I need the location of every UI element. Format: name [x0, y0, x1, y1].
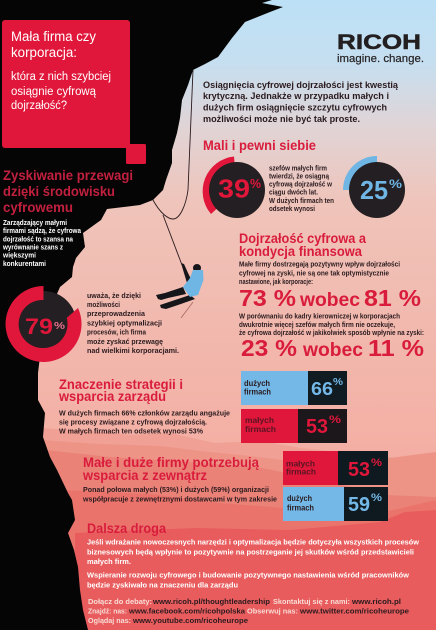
bar: large firms 66%: firmach — [244, 386, 271, 396]
text: 39% explanation: cyfrową dojrzałość w — [269, 180, 332, 188]
footer links: Znajdź: nas: — [88, 606, 127, 616]
statistic: 23% vs 11% — [241, 335, 424, 361]
text: profit optimism: cyfrowej na zyski, nie są one tak optymistycznie — [239, 268, 389, 278]
Ricoh logo — [337, 31, 424, 65]
title box — [2, 20, 146, 164]
text: profit comparison: W porównaniu do kadry kierowniczej w korporacjach — [239, 312, 400, 320]
bar: small firms 53% external: % — [371, 457, 382, 469]
heading: Małe i duże firmy — [82, 454, 259, 483]
text: small firm leaders — [2, 218, 82, 268]
footer links — [88, 597, 409, 625]
donut chart 25%: 25 — [360, 175, 388, 205]
statistic: 73% vs 81%: 73 % — [239, 285, 296, 311]
text: 79% explanation: możliwości — [87, 300, 120, 309]
black cliff — [0, 0, 283, 630]
title subheading — [11, 71, 111, 112]
heading: Dalsza droga: Dalsza droga — [87, 520, 166, 536]
donut chart 79%: % — [54, 321, 65, 332]
text: 39% explanation: szefów małych firm — [269, 164, 327, 172]
heading: Małe i duże firmy: Małe i duże firmy potrzebują — [83, 454, 259, 470]
bar: small firms 53% external: firmach — [286, 466, 316, 476]
text: profit comparison — [239, 312, 424, 337]
title subheading: osiągnie cyfrową — [11, 86, 97, 98]
heading: Znaczenie strategii: Znaczenie strategii i — [59, 376, 183, 392]
text: board engagement: W dużych firmach 66% członków zarządu angażuje — [59, 408, 230, 418]
donut chart 39%: % — [250, 176, 261, 191]
text: next steps: biznesowych będą wpłynie to pozytywnie na postrzeganie jej skutków wśród przedstawicieli — [87, 548, 414, 556]
text: profit optimism: nastawione, jak korporacje: — [239, 277, 313, 286]
text: small firm leaders: większymi — [2, 250, 36, 260]
bar: small firms 53%: % — [329, 414, 341, 426]
bar: large firms 66%: dużych — [244, 378, 270, 388]
footer links: Dołącz do debaty: — [88, 597, 152, 606]
bar: small firms 53% external: małych — [286, 458, 315, 468]
statistic: 23% vs 11%: 23 % — [241, 335, 297, 361]
donut chart 79% — [6, 286, 82, 362]
title heading: Mała firma czy — [11, 29, 96, 44]
heading: Zyskiwanie przewagi: dzięki środowisku — [3, 183, 115, 199]
bar: small firms 53%: 53 — [306, 416, 328, 438]
text: small firm leaders: wyrównanie szans z — [2, 242, 63, 252]
text: next steps — [87, 538, 419, 590]
text: 79% explanation — [87, 291, 179, 355]
footer links: www.twitter.com/ricoheurope — [299, 606, 409, 616]
text: profit comparison: dwukrotnie więcej szefów małych firm nie oczekuje, — [239, 320, 395, 329]
text: small firm leaders: dojrzałość to szansa na — [3, 234, 74, 244]
bar: large firms 59% external: firmach — [287, 502, 314, 512]
intro text — [203, 80, 399, 124]
footer links: www.ricoh.pl/thoughtleadership — [152, 597, 270, 606]
bar: large firms 59% external: 59 — [348, 494, 370, 516]
donut chart 39%: 39 — [218, 174, 250, 204]
text: profit optimism: Małe firmy dostrzegają pozytywny wpływ dojrzałości — [239, 260, 400, 268]
bar: large firms 66% — [241, 371, 347, 405]
bar: small firms 53% external: 53 — [348, 459, 370, 481]
text: 79% explanation: przeprowadzenia — [87, 309, 146, 318]
climber — [156, 263, 204, 318]
text: small firm leaders: firmami sądzą, że cyfrowa — [3, 226, 82, 235]
title subheading: dojrzałość? — [11, 100, 67, 112]
donut chart 39% — [203, 156, 265, 218]
heading: Znaczenie strategii: wsparcia zarządu — [58, 388, 166, 404]
bar: small firms 53% — [241, 409, 347, 443]
text: board engagement — [59, 408, 230, 436]
heading: Zyskiwanie przewagi — [3, 167, 133, 215]
bar: large firms 59% external — [283, 487, 388, 521]
text: board engagement: W małych firmach ten odsetek wynosi 53% — [59, 426, 203, 436]
title subheading: która z nich szybciej — [11, 71, 111, 83]
text: external support: współpracuje z zewnętrznymi dostawcami w tym zakresie — [82, 494, 277, 504]
bar: small firms 53%: małych — [245, 415, 274, 425]
text: 79% explanation: procesów, ich firma — [87, 328, 147, 336]
heading: Zyskiwanie przewagi: cyfrowemu — [3, 199, 73, 215]
text: next steps: Jeśli wdrażanie nowoczesnych narzędzi i optymalizacja będzie dotyczyła wszystkich procesów — [87, 538, 419, 546]
statistic: 73% vs 81%: wobec — [299, 290, 360, 311]
donut chart 25% — [343, 156, 405, 218]
donut chart 79%: 79 — [25, 314, 53, 339]
title heading — [11, 29, 96, 60]
donut chart 25%: % — [389, 177, 402, 191]
text: board engagement: się procesy związane z cyfrową dojrzałością. — [59, 418, 207, 426]
heading: Zyskiwanie przewagi: Zyskiwanie przewagi — [3, 167, 133, 183]
statistic: 73% vs 81% — [239, 285, 421, 311]
text: next steps: będzie zyskiwało na znaczeniu dla zarządu — [87, 580, 238, 590]
text: 79% explanation: szybkiej optymalizacji — [87, 318, 162, 328]
text: 79% explanation: uważa, że dzięki — [87, 291, 141, 300]
bar: large firms 59% external: dużych — [287, 493, 312, 503]
text: small firm leaders: Zarządzający małymi — [3, 218, 67, 227]
bar: large firms 66%: % — [333, 377, 343, 388]
text: profit optimism — [239, 260, 400, 286]
footer links: Obserwuj nas: — [247, 606, 298, 616]
heading: Dojrzałość cyfrowa — [239, 230, 366, 259]
text: next steps: małych firm. — [87, 557, 131, 566]
Ricoh logo: RICOH — [337, 31, 421, 54]
heading: Mali i pewni siebie: Mali i pewni siebie — [203, 137, 316, 153]
bar: small firms 53% external — [283, 451, 388, 485]
bar: large firms 59% external: % — [371, 492, 382, 504]
text: 39% explanation: odsetek wynosi — [269, 204, 315, 213]
text: external support — [82, 485, 277, 504]
text: 39% explanation: twierdzi, że osiągną — [269, 172, 330, 180]
bar: small firms 53%: firmach — [245, 424, 276, 434]
statistic: 23% vs 11%: 11 % — [368, 335, 424, 361]
mountain layers — [40, 428, 436, 630]
heading: Dojrzałość cyfrowa: Dojrzałość cyfrowa a — [239, 230, 366, 246]
footer links: www.facebook.com/ricohpolska — [128, 606, 246, 616]
title heading: korporacja: — [11, 45, 77, 60]
intro text: możliwości może nie być tak proste. — [203, 114, 360, 124]
text: 79% explanation: może zyskać przewagę — [87, 337, 163, 346]
heading: Dojrzałość cyfrowa: kondycja finansowa — [239, 243, 362, 259]
text: 39% explanation: ciągu dwóch lat. — [269, 188, 318, 196]
text: 79% explanation: nad wielkimi korporacjami. — [87, 346, 179, 355]
climbing rope — [153, 70, 193, 265]
footer links: Skontaktuj się z nami: — [273, 597, 350, 606]
intro text: Osiągnięcia cyfrowej dojrzałości jest kwestią — [203, 80, 399, 90]
footer links: Oglądaj nas: — [88, 616, 131, 625]
text: 39% explanation — [269, 164, 334, 213]
bar: large firms 66%: 66 — [311, 378, 333, 399]
intro text: dużych firm osiągnięcie szczytu cyfrowych — [203, 102, 387, 112]
text: small firm leaders: konkurentami — [3, 259, 46, 268]
heading: Znaczenie strategii — [58, 376, 183, 404]
text: external support: Ponad połowa małych (53%) i dużych (59%) organizacji — [83, 485, 269, 494]
footer links: www.ricoh.pl — [351, 597, 401, 606]
Ricoh logo: imagine. change. — [337, 53, 424, 65]
intro text: krytyczną. Jednakże w przypadku małych i — [203, 91, 389, 101]
statistic: 23% vs 11%: wobec — [302, 340, 363, 361]
statistic: 73% vs 81%: 81 % — [364, 285, 421, 311]
text: next steps: Wspieranie rozwoju cyfrowego i budowanie pozytywnego nastawienia wśród pracowników — [87, 570, 409, 580]
heading: Małe i duże firmy: wsparcia z zewnątrz — [82, 467, 207, 483]
footer links: www.youtube.com/ricoheurope — [132, 616, 248, 625]
text: 39% explanation: W dużych firmach ten — [269, 196, 334, 205]
